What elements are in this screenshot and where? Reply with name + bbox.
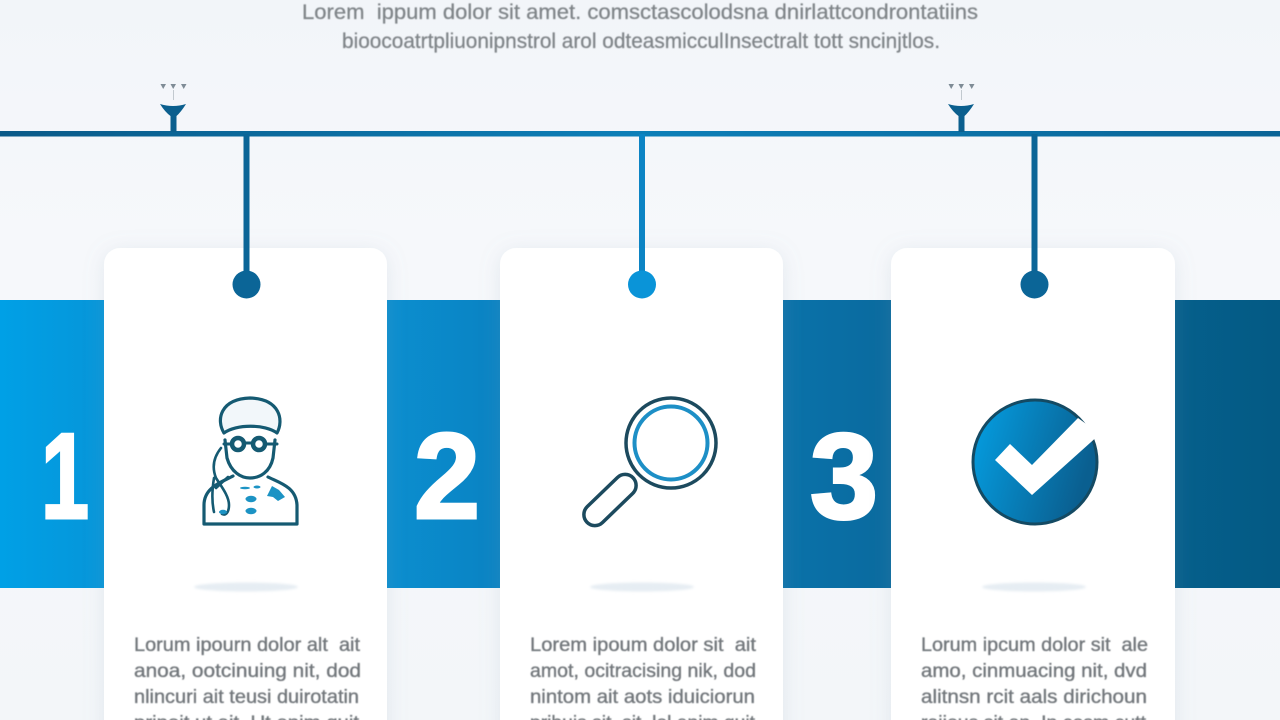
icon shadow 2 bbox=[590, 582, 694, 592]
band segment 2 bbox=[380, 300, 505, 588]
number 2: 2 bbox=[414, 408, 480, 544]
connector 2 bbox=[628, 134, 656, 298]
card 2 text: amot, ocitracising nik, dod bbox=[530, 661, 756, 682]
card 2 text: nintom ait aots iduiciorun bbox=[530, 687, 755, 708]
panel: card 1 bbox=[104, 134, 387, 720]
number 1: 1 bbox=[41, 408, 89, 544]
card 1 text: anoa, ootcinuing nit, dod bbox=[134, 661, 361, 682]
timeline bar bbox=[0, 131, 1280, 136]
band segment 1 bbox=[0, 300, 110, 588]
icon shadow 3 bbox=[982, 582, 1086, 592]
intro text: bioocoatrtpliuonipnstrol arol odteasmicculInsectralt tott sncinjtlos. bbox=[342, 30, 940, 53]
icon shadow 1 bbox=[194, 582, 298, 592]
card 1 text bbox=[134, 635, 361, 720]
intro text bbox=[302, 1, 978, 53]
icon: check badge bbox=[973, 400, 1100, 524]
colored number band bbox=[0, 300, 1280, 588]
icon: magnifier bbox=[579, 398, 716, 530]
marker: left funnel bbox=[160, 84, 186, 132]
connector 3 bbox=[1020, 134, 1048, 298]
card 1 text: nlincuri ait teusi duirotatin bbox=[134, 687, 359, 708]
icon: doctor bbox=[204, 398, 297, 524]
intro text: Lorem ippum dolor sit amet. comsctascolodsna dnirlattcondrontatiins bbox=[302, 1, 978, 24]
number 3: 3 bbox=[810, 408, 878, 544]
card 2 text bbox=[530, 635, 757, 720]
card 1 text: Lorum ipourn dolor alt ait bbox=[134, 635, 361, 656]
card 3 text: Lorum ipcum dolor sit ale bbox=[921, 635, 1148, 656]
card 3 text: amo, cinmuacing nit, dvd bbox=[921, 661, 1147, 682]
band segment 3 bbox=[778, 300, 896, 588]
panel: card 3 bbox=[891, 134, 1175, 720]
card 2 text: Lorem ipoum dolor sit ait bbox=[530, 635, 757, 656]
marker: right funnel bbox=[948, 84, 974, 132]
card 3 text bbox=[921, 635, 1148, 720]
connector 1 bbox=[232, 134, 260, 298]
band segment 4 bbox=[1170, 300, 1280, 588]
card 3 text: alitnsn rcit aals dirichoun bbox=[921, 687, 1147, 708]
panel: card 2 bbox=[500, 134, 783, 720]
